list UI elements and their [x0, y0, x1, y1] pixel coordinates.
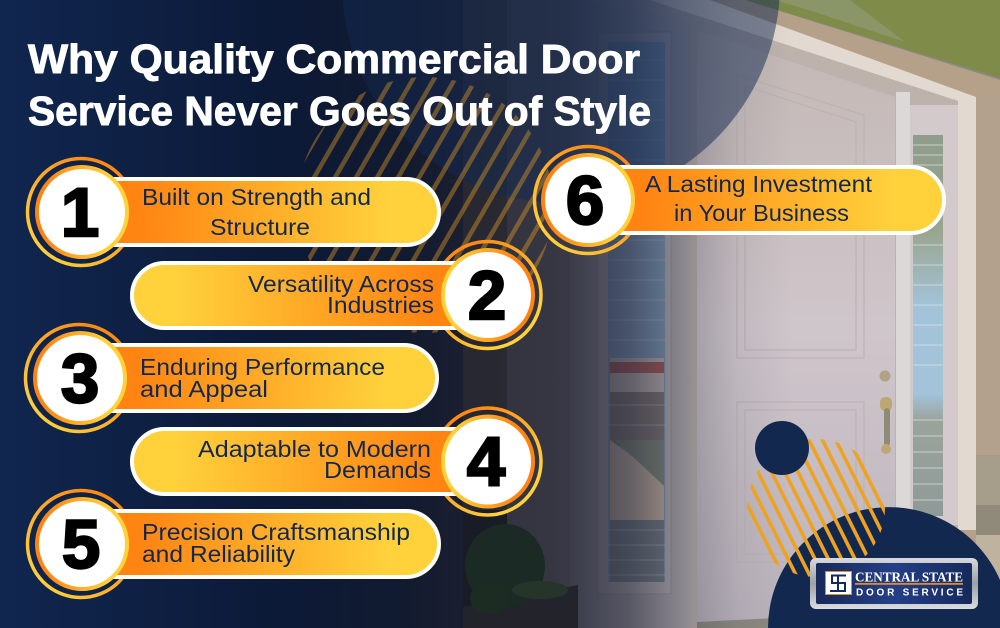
logo: Central State Door Service	[810, 558, 978, 609]
item 1: Built on Strength and Structure: 1	[61, 174, 99, 251]
navy corner semicircle	[768, 507, 1000, 628]
title	[28, 36, 651, 134]
item 1: Built on Strength and Structure	[28, 158, 439, 266]
item 3: Enduring Performance and Appeal: Enduring Performance	[140, 354, 385, 380]
left sidelight	[570, 0, 690, 628]
item 2: Versatility Across Industries: Industries	[327, 292, 434, 318]
item 4: Adaptable to Modern Demands: Demands	[324, 457, 431, 483]
planter silhouette	[463, 510, 578, 628]
item 6: A Lasting Investment in Your Business: 6	[566, 162, 604, 239]
item 1: Built on Strength and Structure: Structure	[210, 214, 310, 240]
item 5: Precision Craftsmanship and Reliability: 5	[62, 506, 100, 583]
title: Service Never Goes Out of Style	[28, 88, 651, 134]
decorative striped circle	[747, 439, 885, 577]
item 1: Built on Strength and Structure: Built on Strength and	[142, 184, 371, 210]
item 6: A Lasting Investment in Your Business: in Your Business	[674, 200, 849, 226]
translucent decorative circle	[342, 0, 780, 203]
item 6: A Lasting Investment in Your Business	[534, 146, 944, 254]
item 4: Adaptable to Modern Demands	[132, 408, 541, 515]
decorative stripes behind list	[304, 77, 549, 333]
item 5: Precision Craftsmanship and Reliability	[28, 490, 439, 598]
item 6: A Lasting Investment in Your Business: A Lasting Investment	[645, 171, 873, 197]
item 3: Enduring Performance and Appeal	[26, 324, 437, 432]
item 2: Versatility Across Industries: Versatility Across	[248, 271, 434, 297]
hardware	[880, 370, 890, 382]
item 2: Versatility Across Industries	[132, 242, 541, 348]
item 5: Precision Craftsmanship and Reliability: and Reliability	[142, 541, 296, 567]
item 2: Versatility Across Industries: 2	[468, 257, 506, 334]
right sidelight	[896, 92, 910, 622]
item 4: Adaptable to Modern Demands: Adaptable to Modern	[198, 436, 431, 462]
right wall and steps	[976, 96, 1000, 628]
item 3: Enduring Performance and Appeal: 3	[61, 340, 99, 417]
ground	[697, 612, 895, 628]
navy accent dot	[755, 421, 809, 475]
logo: Central State Door Service: CENTRAL STATE	[855, 570, 963, 586]
door slab	[697, 30, 895, 628]
item 4: Adaptable to Modern Demands: 4	[467, 423, 505, 500]
title: Why Quality Commercial Door	[28, 36, 640, 82]
item 3: Enduring Performance and Appeal: and Appeal	[140, 376, 268, 402]
shaded wall bands	[463, 0, 570, 628]
logo: Central State Door Service: DOOR SERVICE	[856, 588, 963, 598]
logo mark	[826, 572, 852, 594]
item 5: Precision Craftsmanship and Reliability: Precision Craftsmanship	[142, 519, 410, 545]
